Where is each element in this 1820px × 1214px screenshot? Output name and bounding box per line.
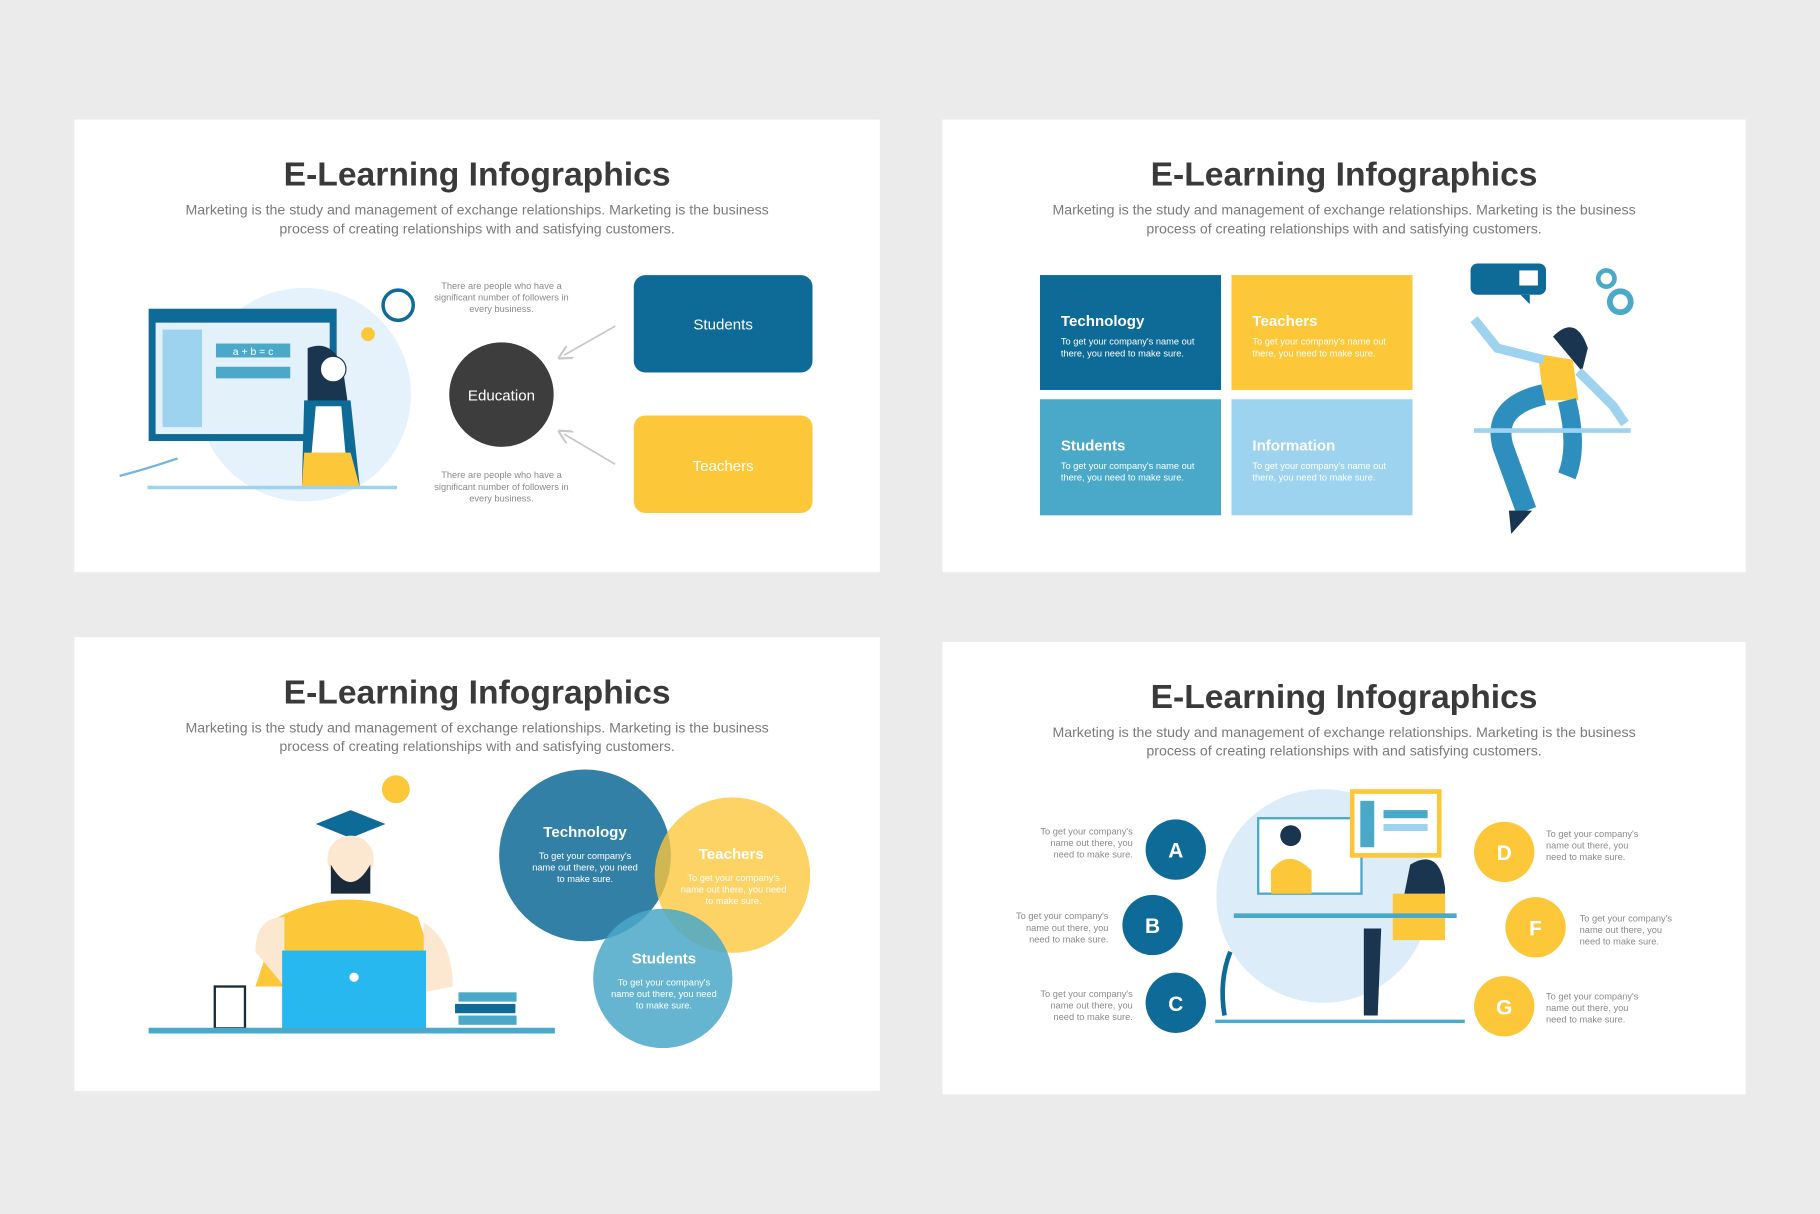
subtitle: Marketing is the study and management of exchange relationships. Marketing is the business bbox=[1052, 724, 1636, 740]
tile: information: there, you need to make sure. bbox=[1252, 472, 1375, 482]
panel: grid bbox=[942, 120, 1746, 572]
circle C bbox=[1146, 973, 1206, 1033]
labels left bbox=[1016, 826, 1133, 1022]
tile: technology: To get your company's name out bbox=[1061, 337, 1195, 347]
illustration: video lesson bbox=[1215, 789, 1465, 1021]
tile: teachers: Teachers bbox=[1252, 313, 1317, 330]
note bottom: significant number of followers in bbox=[434, 482, 569, 492]
box: teachers bbox=[634, 415, 813, 513]
venn: students: to make sure. bbox=[636, 1001, 692, 1011]
education circle bbox=[449, 342, 554, 447]
subtitle: process of creating relationships with and satisfying customers. bbox=[1146, 220, 1542, 236]
venn: teachers bbox=[655, 797, 810, 953]
labels left: need to make sure. bbox=[1054, 1012, 1133, 1022]
tile: teachers: To get your company's name out bbox=[1252, 337, 1386, 347]
labels right: To get your company's bbox=[1546, 829, 1639, 839]
subtitle: process of creating relationships with and satisfying customers. bbox=[279, 738, 675, 754]
tile: technology bbox=[1040, 275, 1221, 390]
subtitle: Marketing is the study and management of exchange relationships. Marketing is the business bbox=[185, 719, 769, 735]
labels right bbox=[1546, 829, 1672, 1024]
tile: technology: there, you need to make sure. bbox=[1061, 348, 1184, 358]
circle G: G bbox=[1496, 996, 1512, 1019]
venn: teachers: to make sure. bbox=[706, 896, 762, 906]
note bottom: There are people who have a bbox=[441, 470, 563, 480]
labels left: To get your company's bbox=[1040, 989, 1133, 999]
note top: significant number of followers in bbox=[434, 293, 569, 303]
illustration: woman waving bbox=[1471, 263, 1631, 534]
tile: students: there, you need to make sure. bbox=[1061, 472, 1184, 482]
subtitle bbox=[185, 202, 769, 236]
subtitle: Marketing is the study and management of exchange relationships. Marketing is the business bbox=[1052, 202, 1636, 218]
box: teachers: Teachers bbox=[693, 458, 754, 475]
title: E-Learning Infographics bbox=[1151, 157, 1538, 194]
labels right: To get your company's bbox=[1546, 991, 1639, 1001]
tile: technology: Technology bbox=[1061, 313, 1145, 330]
illustration: teacher at screen bbox=[120, 288, 413, 501]
panel: education diagram bbox=[74, 120, 880, 572]
labels left: To get your company's bbox=[1016, 911, 1109, 921]
venn: teachers: name out there, you need bbox=[681, 885, 786, 895]
venn: students bbox=[593, 909, 732, 1048]
labels left: need to make sure. bbox=[1054, 850, 1133, 860]
panel: venn bbox=[74, 637, 880, 1091]
circle A bbox=[1146, 819, 1206, 880]
labels left: name out there, you bbox=[1026, 923, 1108, 933]
venn: technology: name out there, you need bbox=[532, 862, 638, 872]
labels left: To get your company's bbox=[1040, 826, 1133, 836]
tile: information bbox=[1231, 399, 1413, 515]
tile: information: To get your company's name out bbox=[1252, 461, 1386, 471]
subtitle: process of creating relationships with and satisfying customers. bbox=[1146, 743, 1542, 759]
subtitle bbox=[1052, 202, 1636, 236]
title: E-Learning Infographics bbox=[284, 674, 671, 711]
tile: students: To get your company's name out bbox=[1061, 461, 1195, 471]
labels right: need to make sure. bbox=[1546, 1014, 1625, 1024]
venn: students: To get your company's bbox=[618, 977, 711, 987]
circle F bbox=[1505, 897, 1566, 958]
title: E-Learning Infographics bbox=[1151, 679, 1538, 716]
subtitle bbox=[1052, 724, 1636, 759]
illustration: graduate with laptop bbox=[149, 775, 555, 1031]
circle G bbox=[1474, 976, 1534, 1036]
circle B: B bbox=[1145, 915, 1160, 938]
tile: teachers: there, you need to make sure. bbox=[1252, 348, 1375, 358]
tile: students: Students bbox=[1061, 437, 1125, 454]
labels right: need to make sure. bbox=[1546, 852, 1625, 862]
venn: teachers: Teachers bbox=[699, 846, 764, 863]
venn: technology: Technology bbox=[543, 824, 627, 841]
labels left: name out there, you bbox=[1050, 1001, 1133, 1011]
circle D bbox=[1474, 822, 1534, 882]
note top: There are people who have a bbox=[441, 281, 563, 291]
panel: letters bbox=[942, 642, 1746, 1094]
labels right: name out there, you bbox=[1580, 925, 1662, 935]
venn: technology bbox=[499, 769, 671, 941]
tile: students bbox=[1040, 399, 1221, 515]
labels right: need to make sure. bbox=[1580, 937, 1659, 947]
circle C: C bbox=[1168, 993, 1183, 1016]
note top: every business. bbox=[469, 304, 534, 314]
circle A: A bbox=[1168, 840, 1183, 863]
venn: students: Students bbox=[632, 950, 696, 967]
venn: teachers: To get your company's bbox=[687, 873, 780, 883]
subtitle bbox=[185, 719, 769, 754]
labels right: To get your company's bbox=[1580, 914, 1672, 924]
title: E-Learning Infographics bbox=[284, 157, 671, 194]
tile: teachers bbox=[1231, 275, 1413, 390]
venn: technology: To get your company's bbox=[539, 851, 632, 861]
box: students: Students bbox=[693, 317, 753, 334]
venn: technology: to make sure. bbox=[557, 874, 613, 884]
tile: information: Information bbox=[1252, 437, 1335, 454]
circle B bbox=[1122, 895, 1183, 955]
subtitle: process of creating relationships with and satisfying customers. bbox=[279, 220, 675, 236]
arrows bbox=[564, 326, 615, 464]
labels right: name out there, you bbox=[1546, 840, 1628, 850]
circle D: D bbox=[1497, 842, 1512, 865]
labels left: need to make sure. bbox=[1029, 934, 1108, 944]
note top bbox=[434, 281, 569, 314]
education circle: Education bbox=[468, 387, 535, 404]
venn: students: name out there, you need bbox=[611, 989, 717, 999]
subtitle: Marketing is the study and management of exchange relationships. Marketing is the business bbox=[185, 202, 769, 218]
note bottom bbox=[434, 470, 569, 503]
labels right: name out there, you bbox=[1546, 1003, 1628, 1013]
box: students bbox=[634, 275, 813, 373]
labels left: name out there, you bbox=[1050, 838, 1133, 848]
note bottom: every business. bbox=[469, 493, 534, 503]
circle F: F bbox=[1529, 917, 1542, 940]
illustration: teacher at screen: a + b = c bbox=[233, 347, 273, 358]
